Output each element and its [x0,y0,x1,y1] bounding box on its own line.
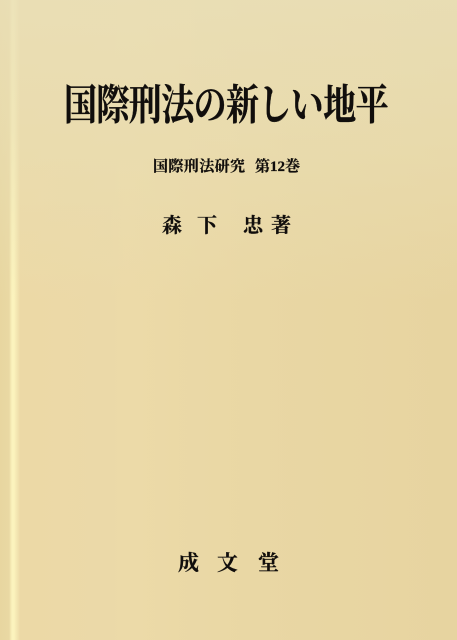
series subtitle: 国際刑法研究 [153,159,245,175]
publisher: 堂 [258,551,279,575]
author name: 忠 [243,215,263,237]
publisher: 成 [178,551,199,575]
author name: 著 [271,215,291,237]
author name: 森 [162,215,182,237]
title: 国際刑法の新しい地平 [64,83,388,130]
series subtitle: 第12巻 [255,159,300,175]
publisher: 文 [217,551,238,575]
publisher [178,551,279,575]
author name [162,214,291,237]
series subtitle [153,158,300,175]
author name: 下 [197,215,217,237]
